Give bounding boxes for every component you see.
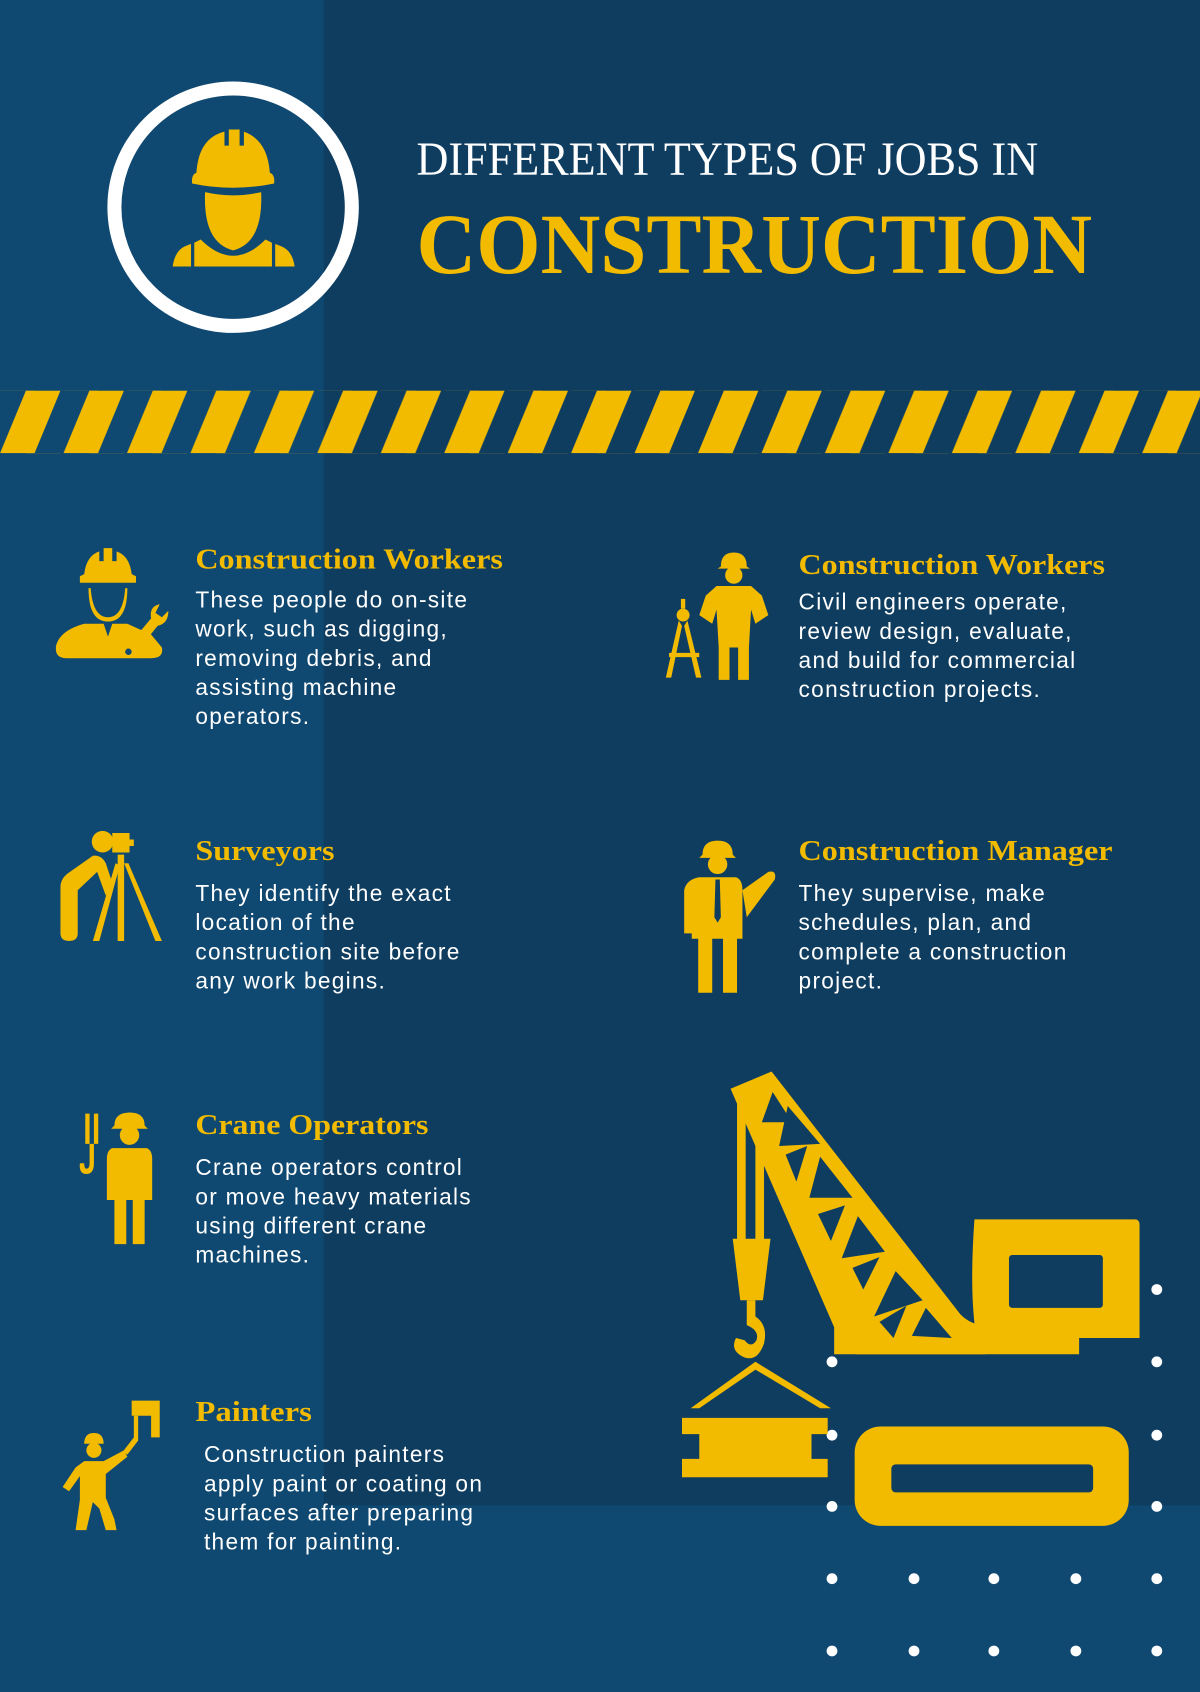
boom <box>731 1072 985 1354</box>
item: construction manager <box>684 836 1113 993</box>
icon: painter with roller <box>63 1401 160 1530</box>
body: work, such as digging, <box>194 616 448 642</box>
dots grid <box>827 1284 1162 1656</box>
icon: manager with blueprints <box>684 841 775 993</box>
body: They identify the exact <box>195 880 452 906</box>
hazard stripe band <box>0 391 1200 453</box>
item: crane operators <box>80 1110 480 1268</box>
body: Civil engineers operate, <box>799 589 1068 615</box>
heading: Construction Workers <box>195 545 503 576</box>
body: operators. <box>195 703 310 729</box>
item: surveyors <box>60 831 468 993</box>
header badge: worker icon in circle <box>114 88 352 326</box>
crane illustration <box>682 1072 1140 1526</box>
body: using different crane <box>195 1212 427 1238</box>
body: assisting machine <box>195 674 397 700</box>
body: They supervise, make <box>799 880 1046 906</box>
body: project. <box>799 967 883 993</box>
body: apply paint or coating on <box>204 1470 483 1496</box>
item: construction workers <box>56 545 503 729</box>
heading: Construction Workers <box>799 550 1105 581</box>
body: construction projects. <box>799 676 1041 702</box>
title <box>417 134 1092 292</box>
body: These people do on-site <box>195 587 468 613</box>
icon: surveyor with tripod <box>60 831 162 941</box>
body: Crane operators control <box>195 1154 463 1180</box>
body: complete a construction <box>799 938 1068 964</box>
body: construction site before <box>195 938 461 964</box>
title: CONSTRUCTION <box>417 196 1092 292</box>
cab <box>834 1219 1140 1354</box>
body: them for painting. <box>204 1529 402 1555</box>
body: schedules, plan, and <box>799 909 1032 935</box>
load <box>682 1418 828 1477</box>
item: civil engineers <box>666 550 1105 702</box>
track <box>855 1427 1129 1526</box>
item: painters <box>63 1397 491 1555</box>
body: Construction painters <box>204 1441 445 1467</box>
body: and build for commercial <box>799 647 1076 673</box>
body: location of the <box>195 909 356 935</box>
crane cutouts <box>762 1092 1103 1492</box>
body: review design, evaluate, <box>799 618 1073 644</box>
hook cable and block <box>737 1103 746 1241</box>
heading: Surveyors <box>195 836 335 867</box>
heading: Construction Manager <box>799 836 1113 867</box>
heading: Crane Operators <box>195 1110 429 1141</box>
slings <box>691 1362 758 1408</box>
icon: crane operator with hook <box>80 1113 152 1244</box>
body: any work begins. <box>195 967 386 993</box>
body: removing debris, and <box>195 645 433 671</box>
body: surfaces after preparing <box>204 1499 474 1525</box>
icon: worker with wrench <box>56 548 168 658</box>
icon: engineer with compass <box>666 552 768 680</box>
title: DIFFERENT TYPES OF JOBS IN <box>417 134 1038 186</box>
body: machines. <box>195 1242 310 1268</box>
body: or move heavy materials <box>195 1183 472 1209</box>
heading: Painters <box>195 1397 312 1428</box>
